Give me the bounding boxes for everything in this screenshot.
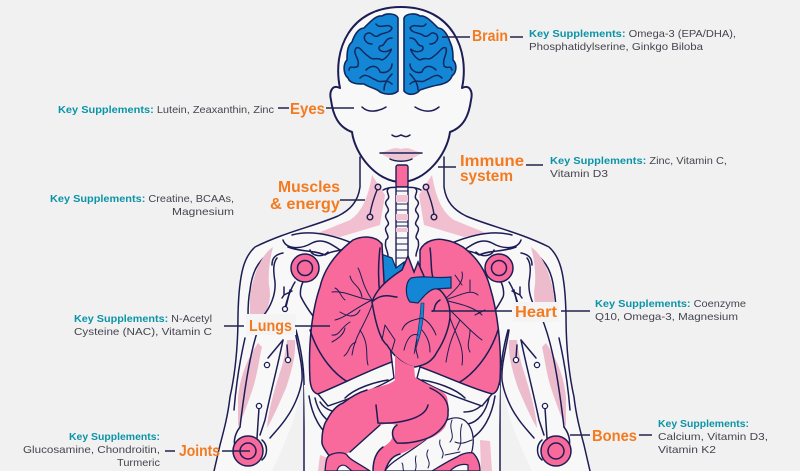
eyes supplements: Key Supplements: Lutein, Zeaxanthin, Zinc [58,104,274,116]
neck muscles [367,184,437,220]
icon: brain [344,14,456,94]
lungs supplements line 2: Cysteine (NAC), Vitamin C [74,326,212,338]
label: muscles and energy [270,179,365,213]
stomach and liver [322,355,448,471]
label: eyes [278,101,354,118]
label: bones: Bones [592,428,637,445]
head [330,7,472,182]
label: muscles and energy: Muscles [278,179,340,196]
white diaphragm bands [318,362,492,406]
joints supplements: Key Supplements: [69,431,160,443]
blue vessels [380,254,404,292]
bones supplements: Key Supplements: [658,418,749,430]
label: joints: Joints [179,443,220,460]
label: brain: Brain [472,28,508,45]
label: joints [165,443,250,460]
heart supplements: Key Supplements: Coenzyme [595,298,746,310]
brain supplements line 2: Phosphatidylserine, Ginkgo Biloba [529,41,703,53]
trachea [383,165,421,269]
label: lungs [224,314,330,335]
nose and mouth [380,135,422,161]
small intestine [385,418,473,471]
bones supplements line 3: Vitamin K2 [658,444,716,456]
body silhouette [214,157,590,471]
label: immune system: system [460,168,513,185]
label: lungs: Lungs [249,318,292,335]
joints supplements line 3: Turmeric [117,457,160,469]
lungs supplements: Key Supplements: N-Acetyl [74,313,212,325]
left lung [309,237,392,394]
label: muscles and energy: & energy [270,196,340,213]
label: eyes: Eyes [290,101,325,118]
large intestine [325,453,480,471]
muscles supplements: Key Supplements: Creatine, BCAAs, [50,193,234,205]
label: immune system [438,153,543,185]
muscles supplements line 2: Magnesium [172,206,234,218]
label: heart [432,302,590,322]
right lung [420,239,500,394]
immune supplements line 2: Vitamin D3 [550,168,608,180]
icon: closed eyes [362,107,439,111]
brain supplements: Key Supplements: Omega-3 (EPA/DHA), [529,28,736,40]
joints supplements line 2: Glucosamine, Chondroitin, [23,444,160,456]
torso ribs [304,385,500,471]
label: brain [442,28,523,45]
label: heart: Heart [515,304,558,321]
immune supplements: Key Supplements: Zinc, Vitamin C, [550,155,727,167]
heart supplements line 2: Q10, Omega-3, Magnesium [595,311,738,323]
heart [372,256,451,367]
label: bones [570,428,652,445]
label: immune system: Immune [460,153,524,170]
bones supplements line 2: Calcium, Vitamin D3, [658,431,768,443]
